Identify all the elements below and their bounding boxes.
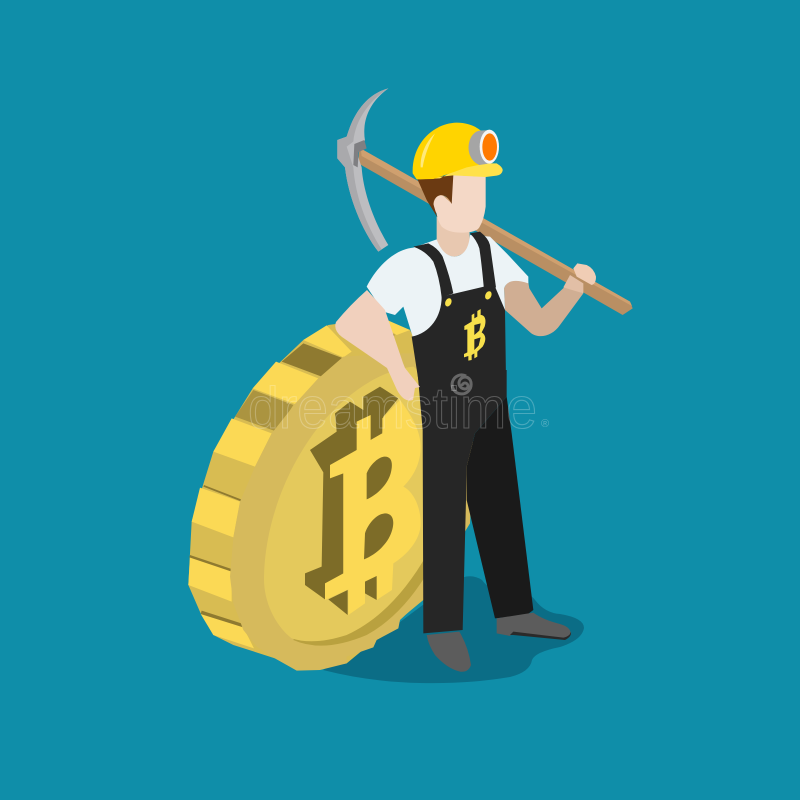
coin inner face bbox=[264, 367, 427, 641]
watermark bbox=[248, 375, 549, 441]
coin side body bbox=[188, 318, 470, 670]
coin tooth recesses bbox=[189, 327, 395, 627]
overall buttons bbox=[444, 297, 453, 308]
overall bib bbox=[412, 286, 506, 380]
helmet brim bbox=[417, 163, 503, 179]
watermark spiral logo bbox=[452, 375, 471, 394]
watermark wordmark: dreamstime bbox=[248, 376, 537, 441]
near shoe bbox=[427, 632, 471, 672]
bitcoin symbol extrusion bbox=[305, 387, 398, 599]
lamp housing bbox=[469, 130, 490, 165]
bitcoin symbol front bbox=[325, 400, 421, 615]
miner figure bbox=[335, 88, 633, 672]
helmet highlight bbox=[421, 133, 435, 167]
head bbox=[413, 123, 503, 233]
far arm and hand bbox=[504, 263, 596, 336]
pickaxe bbox=[337, 88, 633, 315]
gold coin bbox=[188, 318, 473, 671]
overall straps bbox=[413, 243, 453, 297]
helmet dome bbox=[413, 123, 487, 179]
shirt bbox=[367, 235, 528, 337]
neck bbox=[437, 217, 470, 257]
near leg bbox=[417, 370, 507, 633]
legs bbox=[417, 370, 571, 672]
lamp rim bbox=[480, 130, 499, 164]
ground shadow bbox=[323, 576, 584, 683]
pickaxe blade bbox=[337, 88, 388, 252]
far leg bbox=[467, 397, 533, 618]
bitcoin badge bbox=[464, 309, 486, 361]
coin front rim bbox=[230, 353, 473, 671]
far shoe bbox=[497, 613, 571, 639]
coin teeth bbox=[188, 318, 410, 648]
hair bbox=[417, 175, 453, 217]
torso bbox=[367, 217, 528, 380]
watermark registered mark: ® bbox=[541, 418, 549, 430]
coin inner wall bbox=[293, 477, 425, 646]
face bbox=[434, 175, 486, 233]
pickaxe handle bbox=[358, 148, 633, 315]
pickaxe collar bbox=[353, 140, 367, 167]
near arm and hand bbox=[335, 290, 420, 401]
bitcoin symbol counter shading bbox=[328, 457, 393, 615]
lamp glass bbox=[482, 133, 497, 161]
